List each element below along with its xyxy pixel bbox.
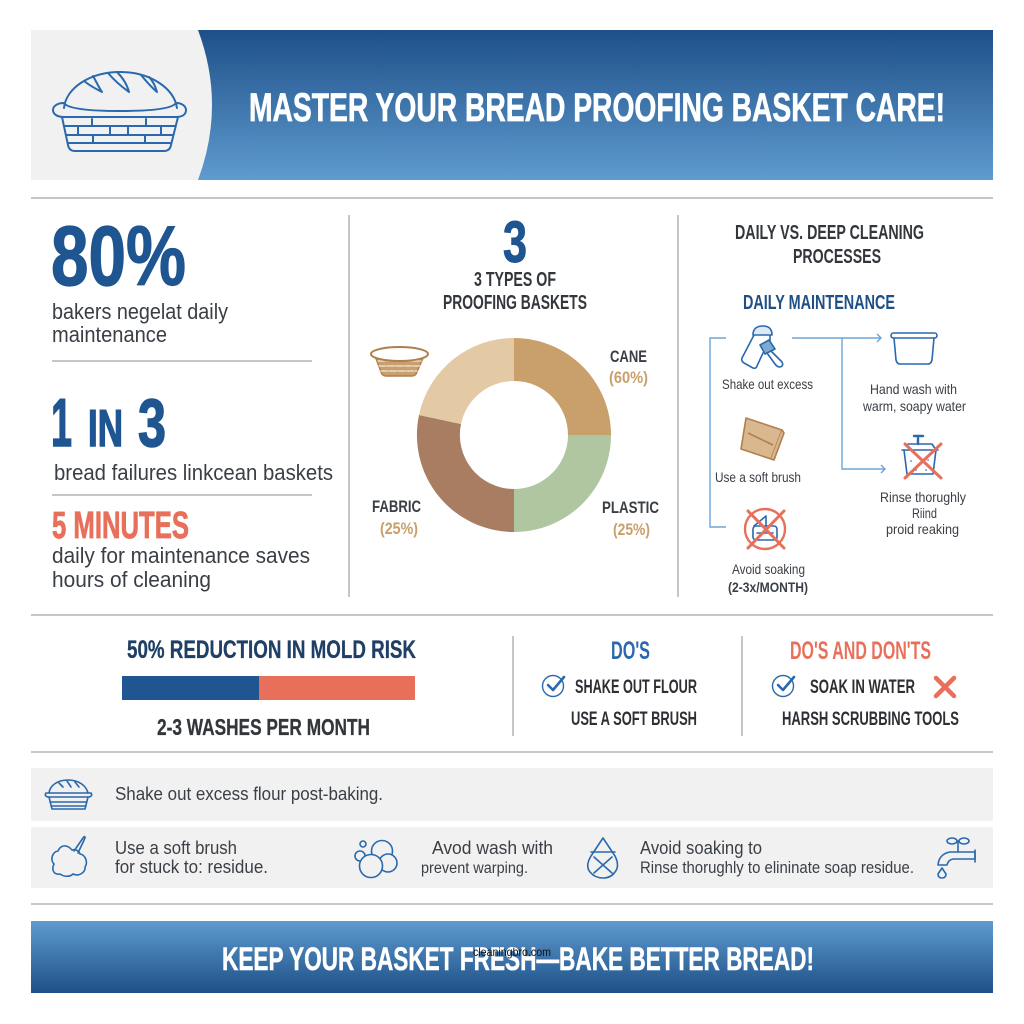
- label: cane: [609, 347, 648, 387]
- progress bar: [122, 676, 415, 700]
- text: use a soft brush: Use a soft brush: [715, 469, 801, 485]
- icon: bread in basket: [53, 72, 186, 151]
- flow connectors: [710, 334, 885, 527]
- text: rinse thoroughly: [880, 489, 966, 537]
- text: hand wash: warm, soapy water: [862, 398, 966, 414]
- text: washes per month: 2-3 WASHES PER MONTH: [157, 714, 370, 740]
- text: use a soft brush: for stuck to: residue.: [115, 857, 268, 877]
- text: bread failures: bread failures linkcean baskets: [54, 460, 333, 485]
- text: shake out excess: Shake out excess: [722, 376, 813, 392]
- text: shake out excess flour: Shake out excess flour post-baking.: [115, 784, 383, 804]
- label: plastic: [602, 498, 659, 539]
- panel: do's and don'ts: [772, 637, 959, 730]
- text: avoid soaking and rinse: Rinse thorughly to elininate soap residue.: [640, 859, 914, 877]
- watermark: cleaningbro.com: [473, 945, 551, 959]
- icon: soap bubbles: [355, 840, 397, 878]
- text: use a soft brush: [115, 838, 268, 877]
- heading: do's and don'ts: DO'S AND DON'TS: [790, 637, 931, 665]
- heading: types of proofing baskets: PROOFING BASKETS: [443, 292, 587, 314]
- panel: key statistics: [51, 209, 333, 592]
- label: fabric: (25%): [380, 519, 418, 538]
- panel: cleaning processes: [710, 222, 966, 595]
- text: avoid soaking: [728, 561, 808, 595]
- text: use a soft brush: Use a soft brush: [115, 838, 237, 858]
- text: hand wash: [862, 381, 966, 414]
- text: avoid wash: prevent warping.: [421, 860, 528, 877]
- text: hand wash: Hand wash with: [870, 381, 957, 397]
- heading: do's: DO'S: [611, 637, 650, 665]
- icon: faucet: [938, 838, 975, 878]
- donut chart: [417, 338, 611, 532]
- text: daily maintenance saves hours: hours of cleaning: [52, 567, 211, 592]
- footer banner: [31, 921, 993, 993]
- icon: shaker and brush: [742, 326, 783, 368]
- text: rinse thoroughly: Riind: [912, 505, 937, 521]
- text: avoid soaking: (2-3x/MONTH): [728, 579, 808, 595]
- text: daily maintenance saves hours: [52, 543, 310, 592]
- icon: brush cloud: [52, 836, 86, 876]
- label: cane: CANE: [610, 347, 647, 366]
- text: daily maintenance saves hours: daily for maintenance saves: [52, 543, 310, 568]
- stat: 1 in 3: IN: [88, 400, 123, 458]
- subheading: daily maintenance: DAILY MAINTENANCE: [743, 292, 895, 314]
- text: bakers neglect maintenance: bakers negelat daily: [52, 299, 228, 324]
- label: cane: (60%): [609, 368, 648, 387]
- heading: types of proofing baskets: [443, 269, 587, 314]
- strip: care tips: [31, 827, 993, 888]
- list: do items: USE A SOFT BRUSH: [571, 709, 697, 730]
- icon: check: [542, 676, 564, 696]
- header banner: [31, 30, 993, 180]
- heading: daily vs deep cleaning: [735, 222, 924, 268]
- label: fabric: [372, 497, 421, 538]
- text: avoid wash: [421, 838, 553, 877]
- big number 3: 3: [503, 210, 527, 275]
- text: rinse thoroughly: proid reaking: [886, 521, 959, 537]
- text: bakers neglect maintenance: [52, 299, 228, 347]
- stat: 80%: 80%: [51, 209, 186, 303]
- heading: daily vs deep cleaning: PROCESSES: [793, 246, 881, 268]
- text: bakers neglect maintenance: maintenance: [52, 322, 167, 347]
- text: avoid wash: Avod wash with: [432, 838, 553, 858]
- icon: bread basket small: [45, 780, 92, 809]
- heading: types of proofing baskets: 3 TYPES OF: [474, 269, 556, 291]
- icon: cross: [936, 678, 954, 696]
- strip: shake out tip: [31, 768, 993, 821]
- text: avoid soaking and rinse: Avoid soaking to: [640, 838, 762, 858]
- icon: water drop crossed: [588, 838, 618, 878]
- icon: soft cloth: [741, 418, 784, 460]
- text: avoid soaking: Avoid soaking: [732, 561, 805, 577]
- stat: 1 in 3: 3: [138, 385, 166, 461]
- stat: 1 in 3: [51, 385, 166, 461]
- stat: 1 in 3: 1: [51, 385, 72, 461]
- heading: daily vs deep cleaning: DAILY VS. DEEP CLEANING: [735, 222, 924, 244]
- icon: avoid soaking crossed: [745, 509, 785, 549]
- list: do items: [571, 677, 697, 730]
- text: avoid soaking and rinse: [640, 838, 914, 877]
- panel: mold risk reduction: [122, 636, 416, 740]
- icon: tub: [891, 333, 937, 364]
- label: plastic: (25%): [613, 520, 650, 539]
- panel: basket types: [371, 210, 659, 539]
- icon: check: [772, 676, 794, 696]
- text: rinse thoroughly: Rinse thorughly: [880, 489, 966, 505]
- panel: do's: [542, 637, 697, 730]
- heading: mold risk: 50% REDUCTION IN MOLD RISK: [127, 636, 416, 664]
- label: plastic: PLASTIC: [602, 498, 659, 517]
- label: fabric: FABRIC: [372, 497, 421, 516]
- icon: rinse strainer crossed: [902, 436, 941, 478]
- list: do items: SHAKE OUT FLOUR: [575, 677, 697, 698]
- text: soak in water: SOAK IN WATER: [810, 677, 915, 698]
- stat: 5 minutes: 5 MINUTES: [52, 505, 189, 547]
- icon: wicker basket: [371, 347, 428, 376]
